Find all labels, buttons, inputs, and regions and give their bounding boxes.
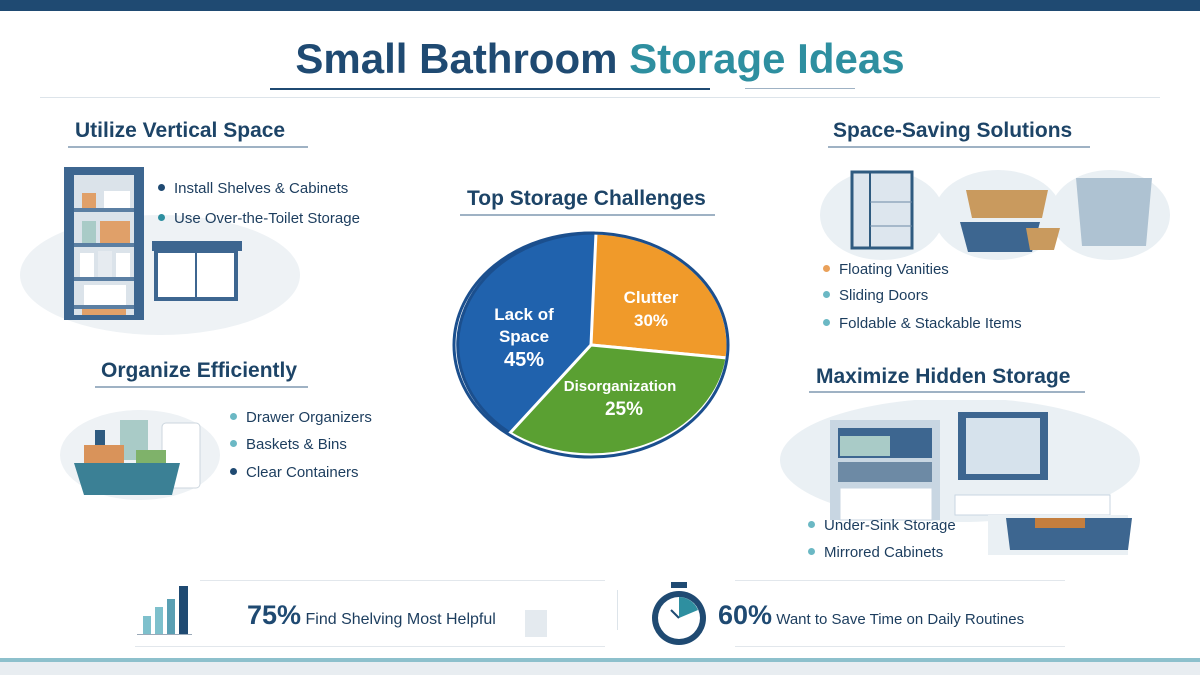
panel: maximize hidden storage: Mirrored Cabinets (824, 544, 943, 561)
list: Install Shelves & Cabinets (174, 180, 348, 197)
pie chart: top storage challenges: 25% (605, 399, 643, 420)
pie chart: top storage challenges: Lack of (494, 305, 554, 324)
icon: shelf and cabinet (20, 167, 300, 335)
panel: space-saving solutions (820, 119, 1170, 332)
panel: utilize vertical space (20, 119, 360, 335)
icon: vanity with drawer (780, 400, 1140, 555)
panel: organize efficiently (60, 359, 372, 500)
pie chart: top storage challenges (452, 187, 730, 458)
list: Floating Vanities (839, 261, 949, 278)
slice: clutter (591, 233, 728, 358)
pie chart: top storage challenges: 45% (504, 349, 544, 371)
icon: document (525, 610, 547, 637)
heading: Top Storage Challenges (467, 187, 706, 210)
icon: bar chart (137, 586, 192, 635)
pie chart: top storage challenges: 30% (634, 311, 668, 330)
panel: space-saving solutions: Foldable & Stackable Items (839, 315, 1022, 332)
icon: basket with bottles (60, 410, 220, 500)
icon: stopwatch (652, 582, 706, 645)
text: 60% Want to Save Time on Daily Routines (718, 600, 1024, 630)
heading: Organize Efficiently (101, 359, 297, 382)
heading: Maximize Hidden Storage (816, 365, 1070, 388)
stat: save time (652, 580, 1065, 647)
panel: space-saving solutions: Sliding Doors (839, 287, 928, 304)
heading: Utilize Vertical Space (75, 119, 285, 142)
stat: shelving (135, 580, 605, 647)
pie chart: top storage challenges: Disorganization (564, 378, 676, 395)
panel: organize efficiently: Baskets & Bins (246, 436, 347, 453)
list: Drawer Organizers (246, 409, 372, 426)
title: Small Bathroom Storage Ideas (295, 35, 905, 82)
pie chart: top storage challenges: Space (499, 327, 549, 346)
slice: disorganization (510, 345, 727, 455)
icons: cabinet, baskets, bin (820, 170, 1170, 260)
heading: Space-Saving Solutions (833, 119, 1072, 142)
slice: lack of space (458, 233, 596, 433)
text: 75% Find Shelving Most Helpful (247, 600, 496, 630)
pie chart: top storage challenges: Clutter (624, 288, 679, 307)
list: Under-Sink Storage (824, 517, 956, 534)
panel: maximize hidden storage (780, 365, 1140, 561)
top bar (0, 0, 1200, 11)
panel: organize efficiently: Clear Containers (246, 464, 359, 481)
panel: utilize vertical space: Use Over-the-Toilet Storage (174, 210, 360, 227)
bottom band (0, 658, 1200, 662)
